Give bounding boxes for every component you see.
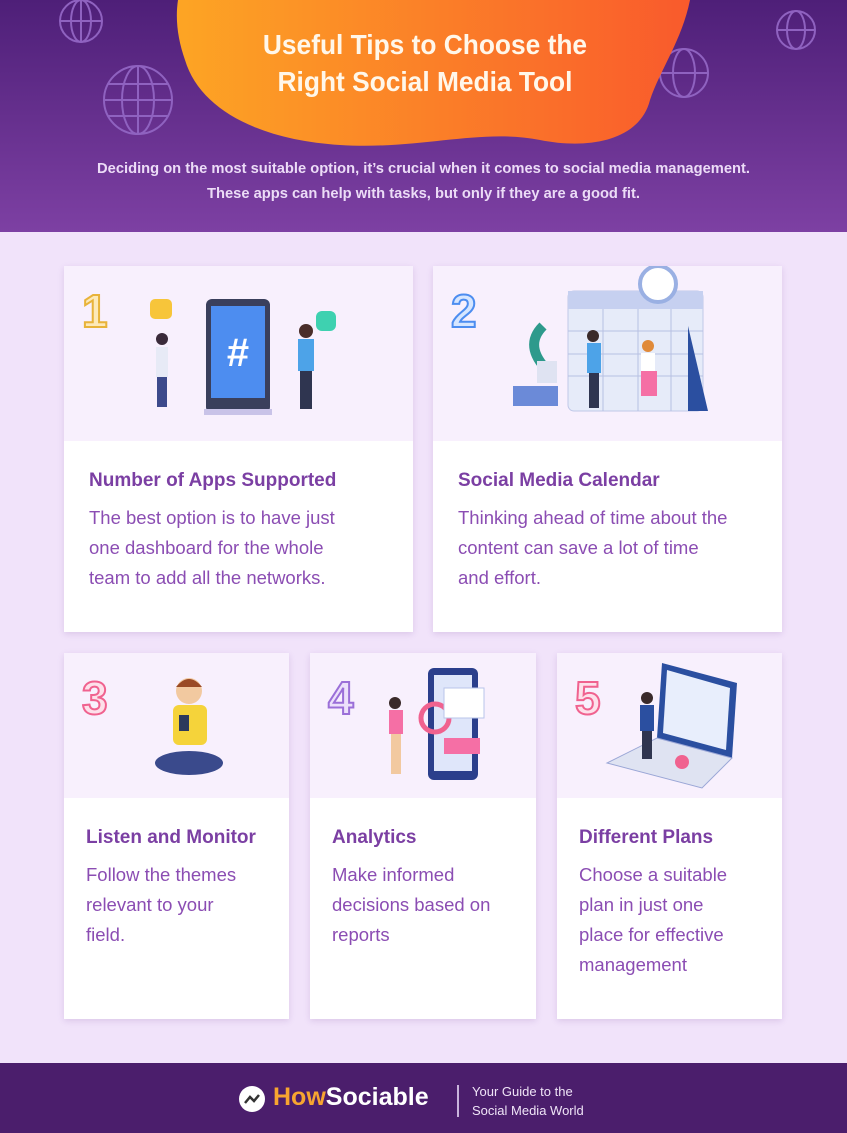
heading: Listen and Monitor bbox=[86, 827, 256, 848]
text: Make informed bbox=[332, 864, 454, 885]
heading: Number of Apps Supported bbox=[89, 470, 336, 491]
icon: phone with hashtag and people bbox=[150, 299, 336, 415]
text: Thinking ahead of time about the bbox=[458, 507, 727, 528]
subtitle: These apps can help with tasks, but only if they are a good fit. bbox=[207, 185, 640, 202]
text: Choose a suitable bbox=[579, 864, 727, 885]
text: reports bbox=[332, 924, 390, 945]
text: and effort. bbox=[458, 567, 541, 588]
text: management bbox=[579, 954, 687, 975]
footer bbox=[0, 1063, 847, 1133]
text bbox=[332, 864, 490, 945]
text bbox=[86, 864, 236, 945]
number 1: 1 bbox=[82, 285, 108, 337]
icon: calendar bbox=[513, 266, 708, 412]
tagline: Social Media World bbox=[472, 1103, 584, 1118]
text bbox=[89, 507, 335, 588]
logo icon bbox=[239, 1086, 265, 1112]
tagline: Your Guide to the bbox=[472, 1084, 573, 1099]
icon: person with phone bbox=[155, 678, 223, 775]
text bbox=[579, 864, 727, 975]
icon: phone with hashtag and people: # bbox=[227, 331, 249, 375]
text: The best option is to have just bbox=[89, 507, 335, 528]
tagline bbox=[472, 1084, 584, 1118]
card 2 bbox=[433, 266, 782, 632]
text: one dashboard for the whole bbox=[89, 537, 324, 558]
card 5 bbox=[557, 653, 782, 1019]
number 2: 2 bbox=[451, 285, 477, 337]
card 3 bbox=[64, 653, 289, 1019]
header bbox=[0, 0, 847, 232]
logo text: HowSociable bbox=[273, 1083, 429, 1111]
text bbox=[458, 507, 727, 588]
icon: analytics phone bbox=[389, 668, 484, 780]
text: field. bbox=[86, 924, 125, 945]
title bbox=[263, 29, 587, 97]
text: content can save a lot of time bbox=[458, 537, 699, 558]
text: relevant to your bbox=[86, 894, 214, 915]
heading: Analytics bbox=[332, 827, 416, 848]
text: place for effective bbox=[579, 924, 724, 945]
text: decisions based on bbox=[332, 894, 490, 915]
title: Right Social Media Tool bbox=[278, 66, 572, 97]
text: Follow the themes bbox=[86, 864, 236, 885]
number 5: 5 bbox=[575, 672, 601, 724]
number 4: 4 bbox=[328, 672, 354, 724]
title blob bbox=[176, 0, 690, 146]
number 3: 3 bbox=[82, 672, 108, 724]
icon: laptop checklist bbox=[606, 663, 737, 788]
globes decoration bbox=[59, 0, 816, 135]
subtitle: Deciding on the most suitable option, it’s crucial when it comes to social media management. bbox=[97, 160, 750, 177]
subtitle bbox=[97, 160, 750, 202]
title: Useful Tips to Choose the bbox=[263, 29, 587, 60]
heading: Different Plans bbox=[579, 827, 713, 848]
text: plan in just one bbox=[579, 894, 703, 915]
card 4 bbox=[310, 653, 536, 1019]
heading: Social Media Calendar bbox=[458, 470, 660, 491]
card 1 bbox=[64, 266, 413, 632]
text: team to add all the networks. bbox=[89, 567, 326, 588]
